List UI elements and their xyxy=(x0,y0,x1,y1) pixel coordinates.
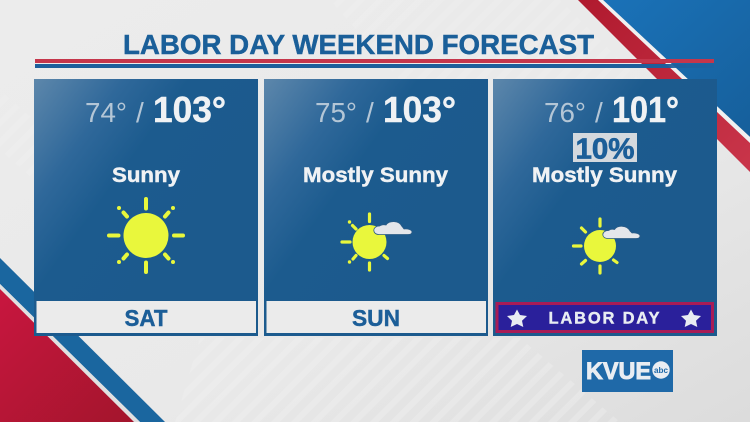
title rule xyxy=(35,59,714,68)
temperatures: / xyxy=(595,97,603,128)
temperatures: 101° xyxy=(612,89,679,130)
day label: SUN xyxy=(266,301,486,333)
top-right corner graphic xyxy=(578,0,750,172)
temperatures xyxy=(544,89,679,130)
temperatures: 103° xyxy=(383,89,456,130)
logo: KVUE abc: abc xyxy=(654,365,668,375)
temperatures: 103° xyxy=(153,89,226,130)
panel: Labor Day Monday xyxy=(493,79,717,336)
panel: Sunday xyxy=(264,79,488,336)
day label: SAT xyxy=(36,301,256,333)
temperatures xyxy=(85,89,226,130)
temperatures: / xyxy=(136,97,144,128)
day label: LABOR DAY banner xyxy=(497,304,712,332)
icon: sun behind cloud xyxy=(342,214,412,270)
day label: LABOR DAY banner: LABOR DAY xyxy=(548,310,660,328)
logo: KVUE abc xyxy=(582,350,673,392)
bottom-left corner graphic xyxy=(0,258,165,422)
icon: star left xyxy=(507,310,527,327)
temperatures: 76° xyxy=(544,97,586,128)
icon: sun xyxy=(109,199,183,272)
temperatures: 74° xyxy=(85,97,127,128)
icon: star right xyxy=(681,310,701,327)
icon: sun behind cloud xyxy=(574,219,640,273)
day label: SAT: SAT xyxy=(124,305,168,331)
temperatures: / xyxy=(366,97,374,128)
condition: Mostly Sunny xyxy=(532,164,677,187)
precipitation chance: 10% xyxy=(576,134,635,166)
panel: Saturday xyxy=(34,79,258,336)
temperatures xyxy=(315,89,456,130)
day label: SUN: SUN xyxy=(352,305,400,331)
condition: Sunny xyxy=(112,164,180,187)
condition: Mostly Sunny xyxy=(303,164,448,187)
title: LABOR DAY WEEKEND FORECAST xyxy=(123,29,594,60)
temperatures: 75° xyxy=(315,97,357,128)
logo: KVUE abc: KVUE xyxy=(586,358,651,385)
